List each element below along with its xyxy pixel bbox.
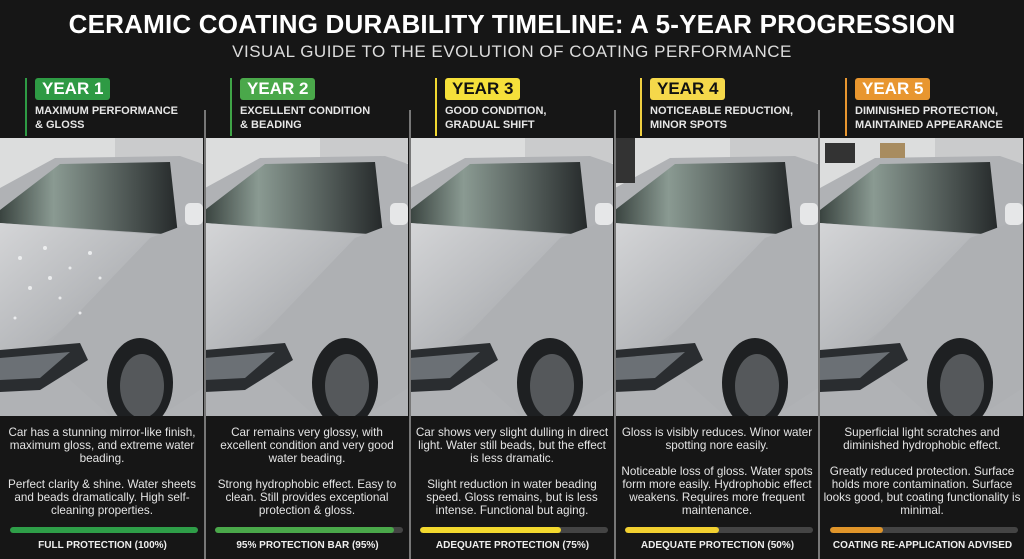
panel: year 2: [206, 78, 408, 551]
photo: car year 3: [411, 138, 613, 416]
text: year 5: Greatly reduced protection. Surface holds more contamination. Surface looks good, but coating functionality is minimal.: [824, 465, 1020, 517]
header: year 1: MAXIMUM PERFORMANCE: [35, 105, 178, 117]
bar: year 1: [10, 527, 198, 533]
header: year 2: [230, 78, 370, 136]
photo: car year 1: [0, 138, 203, 416]
text: year 3: Car shows very slight dulling in direct light. Water still beads, but the effect is less dramatic.: [416, 426, 608, 465]
subtitle: VISUAL GUIDE TO THE EVOLUTION OF COATING PERFORMANCE: [232, 42, 792, 61]
text: year 2: [218, 426, 396, 517]
header: year 1: [25, 78, 178, 136]
header: year 3: [435, 78, 546, 136]
bar: year 2: [215, 527, 403, 533]
label: year 2: 95% PROTECTION BAR (95%): [236, 540, 379, 551]
header: year 4: MINOR SPOTS: [650, 119, 727, 131]
label: year 4: ADEQUATE PROTECTION (50%): [641, 540, 794, 551]
text: year 4: Noticeable loss of gloss. Water spots form more easily. Hydrophobic effect weakens. Requires more frequent maintenance.: [621, 465, 813, 517]
panel: year 4: [616, 78, 818, 551]
text: year 1: [8, 426, 196, 517]
header: year 5: YEAR 5: [862, 79, 923, 98]
photo: car year 2: [206, 138, 408, 416]
label: year 1: FULL PROTECTION (100%): [38, 540, 167, 551]
text: year 2: Car remains very glossy, with excellent condition and very good water beading.: [220, 426, 394, 465]
panel: year 5: [820, 78, 1023, 551]
label: year 5: COATING RE-APPLICATION ADVISED: [833, 540, 1012, 551]
header: year 5: DIMINISHED PROTECTION,: [855, 105, 998, 117]
header: year 2: & BEADING: [240, 119, 302, 131]
text: year 1: Car has a stunning mirror-like finish, maximum gloss, and extreme water beading.: [8, 426, 196, 465]
label: year 3: ADEQUATE PROTECTION (75%): [436, 540, 589, 551]
text: year 3: [416, 426, 608, 517]
header: year 2: EXCELLENT CONDITION: [240, 105, 370, 117]
text: year 5: Superficial light scratches and diminished hydrophobic effect.: [843, 426, 1001, 452]
header: year 1: & GLOSS: [35, 119, 85, 131]
header: year 3: YEAR 3: [452, 79, 513, 98]
text: year 4: Gloss is visibly reduces. Winor water spotting nore easily.: [622, 426, 812, 452]
bar: year 3: [420, 527, 608, 533]
title: CERAMIC COATING DURABILITY TIMELINE: A 5-YEAR PROGRESSION: [69, 9, 955, 39]
header: year 2: YEAR 2: [247, 79, 308, 98]
text: year 3: Slight reduction in water beading speed. Gloss remains, but is less intense. Functional but aging.: [426, 478, 598, 517]
text: year 5: [824, 426, 1020, 517]
photo: car year 4: [616, 138, 818, 416]
header: year 1: YEAR 1: [42, 79, 103, 98]
text: year 2: Strong hydrophobic effect. Easy to clean. Still provides exceptional protection & gloss.: [218, 478, 396, 517]
text: year 4: [621, 426, 813, 517]
header: year 3: GRADUAL SHIFT: [445, 119, 535, 131]
header: year 4: YEAR 4: [657, 79, 718, 98]
header: year 5: MAINTAINED APPEARANCE: [855, 119, 1003, 131]
panel: year 3: [411, 78, 613, 551]
header: year 4: NOTICEABLE REDUCTION,: [650, 105, 793, 117]
header: year 4: [640, 78, 793, 136]
text: year 1: Perfect clarity & shine. Water sheets and beads dramatically. High self-cleaning properties.: [8, 478, 196, 517]
bar: year 5: [830, 527, 1018, 533]
bar: year 4: [625, 527, 813, 533]
photo: car year 5: [820, 138, 1023, 416]
header: year 3: GOOD CONDITION,: [445, 105, 546, 117]
header: year 5: [845, 78, 1003, 136]
panel: year 1: [0, 78, 203, 551]
